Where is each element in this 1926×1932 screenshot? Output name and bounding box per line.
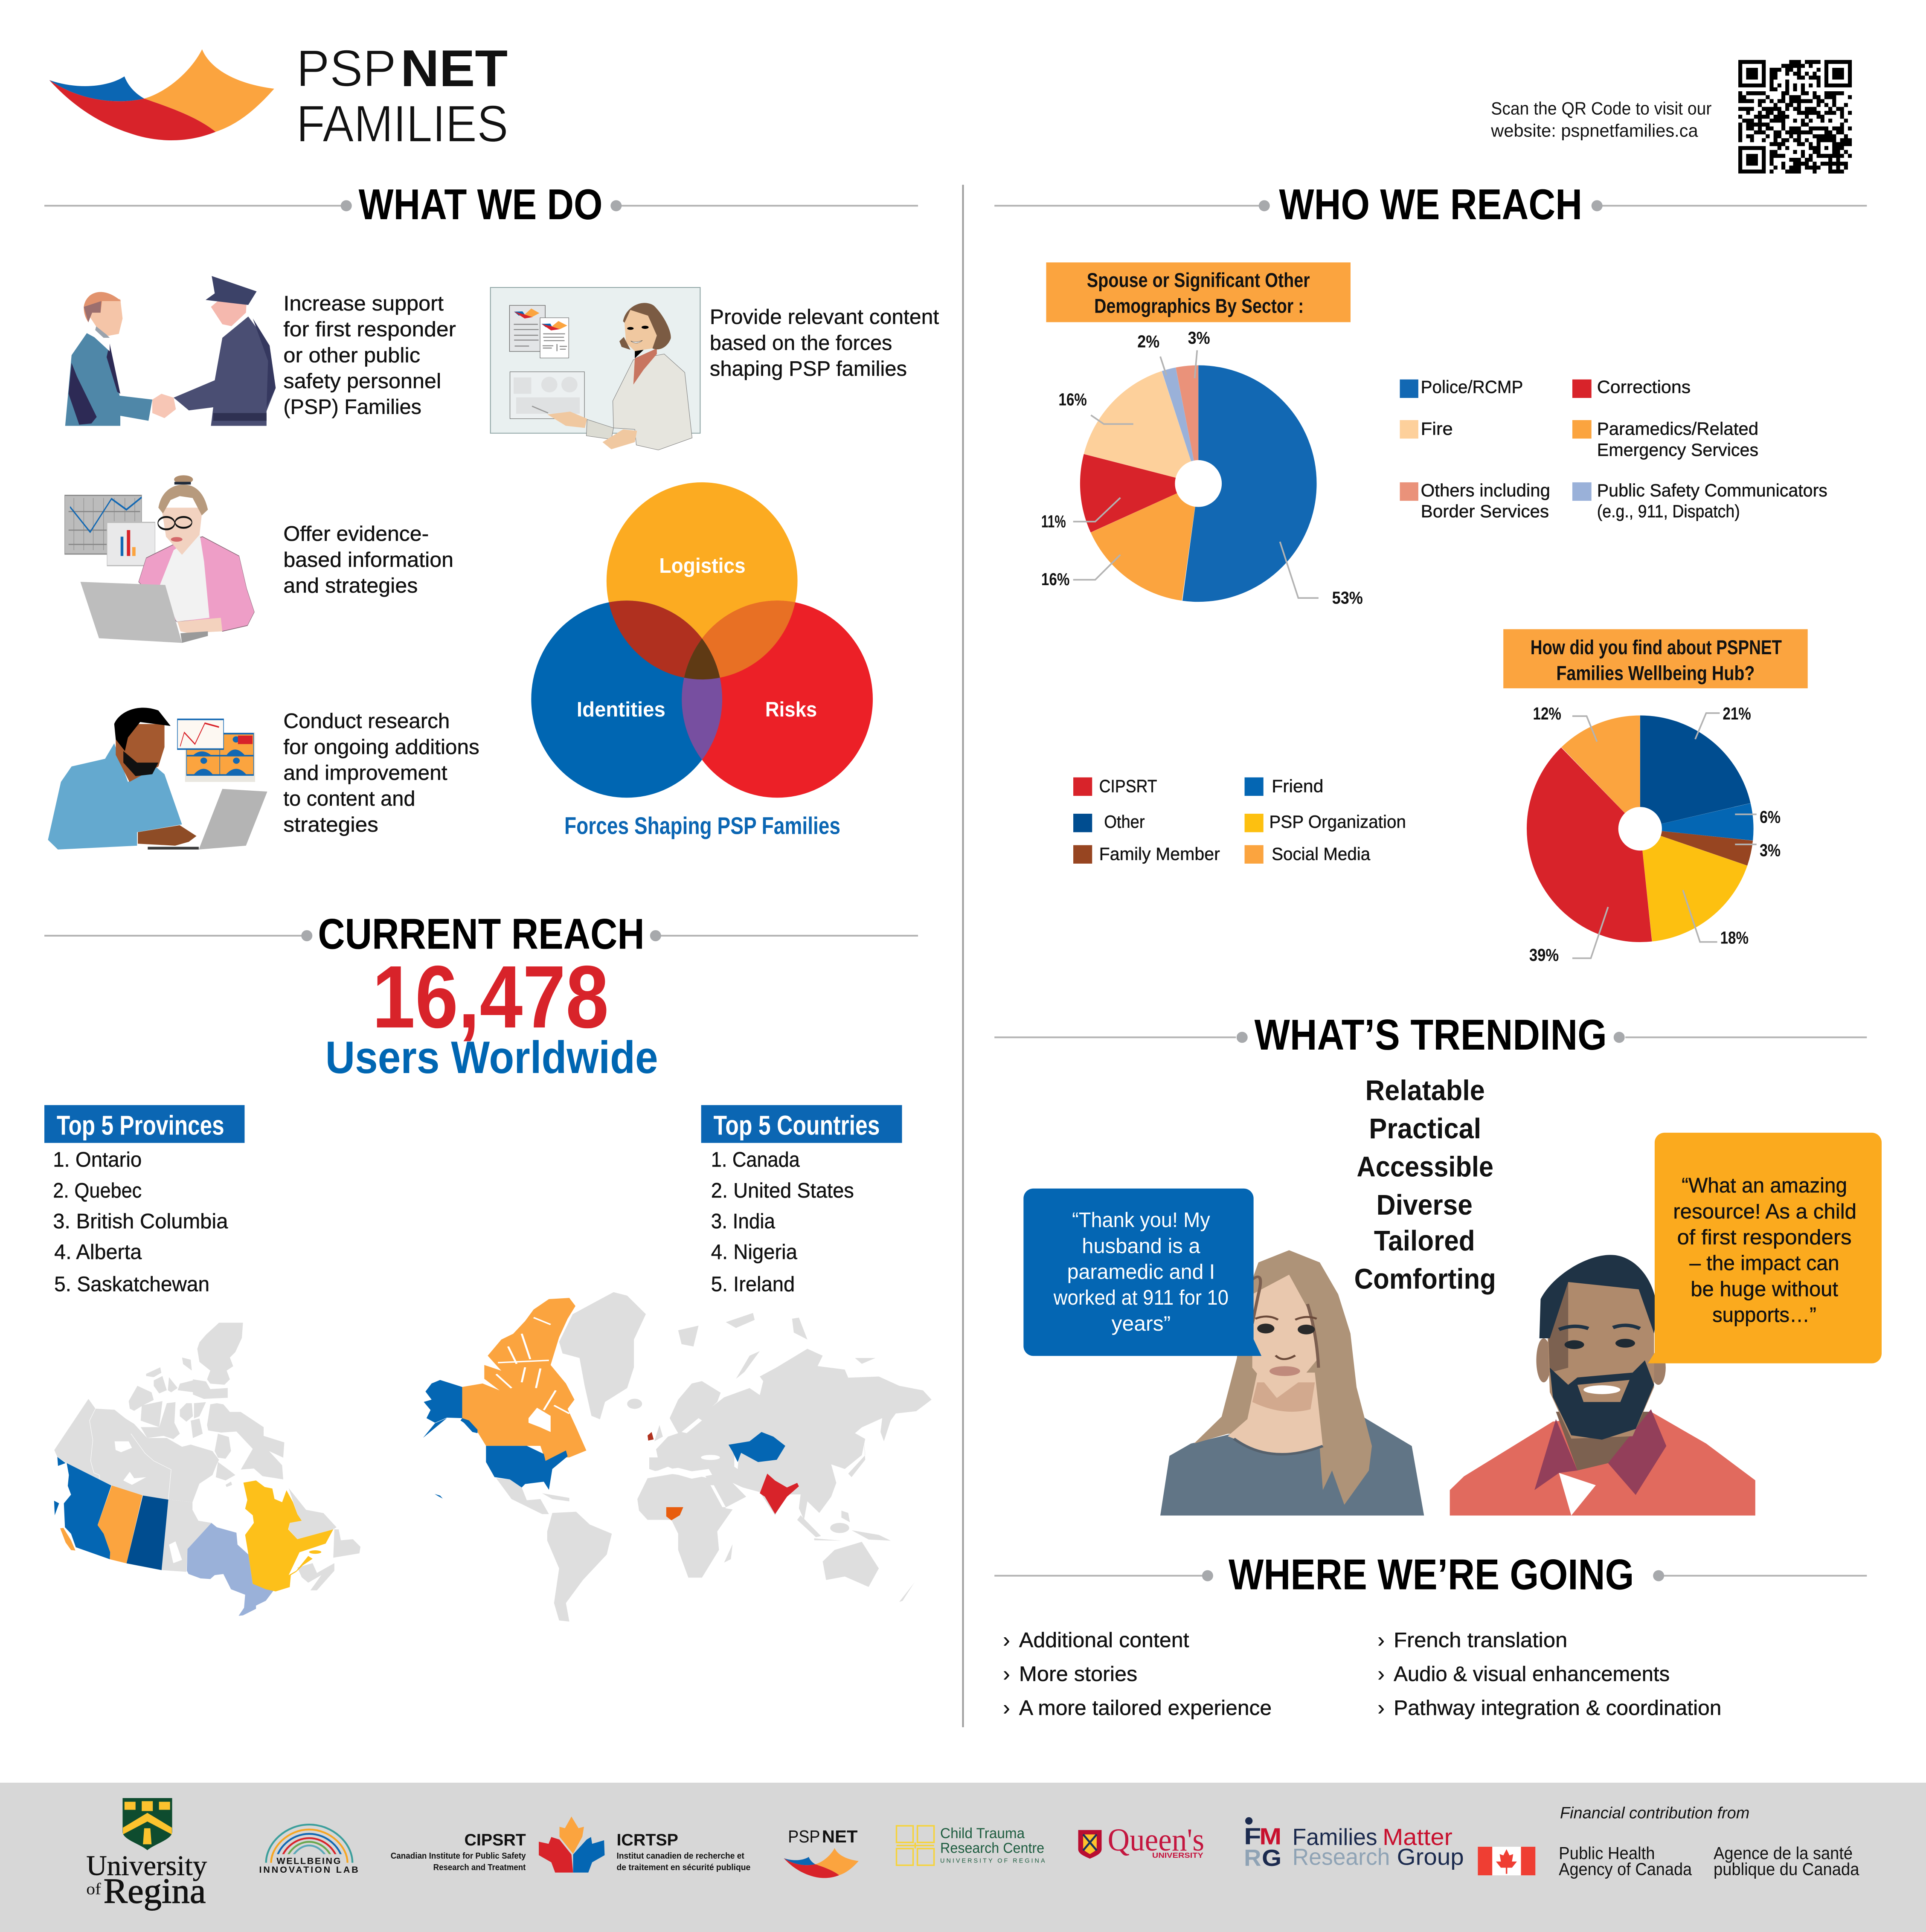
bullet list: next steps right: French translation	[1394, 1629, 1567, 1652]
logo: Canada flag and funder: Financial contribution from	[1560, 1804, 1749, 1822]
logo: Canada flag and funder: Public Health	[1559, 1843, 1655, 1863]
list: top 5 provinces	[44, 1105, 244, 1296]
list: top 5 provinces: 1. Ontario	[53, 1149, 142, 1172]
logo: CIPSRT ICRTSP	[391, 1816, 750, 1873]
pie chart: how users found the hub: 21%	[1723, 704, 1751, 723]
list: top 5 countries: 5. Ireland	[711, 1273, 795, 1296]
speech bubble: orange testimonial	[1648, 1133, 1882, 1363]
logo: Child Trauma Research Centre	[897, 1825, 1045, 1865]
speech bubble: blue testimonial: husband is a	[1082, 1235, 1200, 1258]
venn caption: Forces Shaping PSP Families	[564, 812, 840, 839]
logo: Families Matter Research Group: Research	[1293, 1844, 1390, 1870]
logo wordmark	[296, 39, 508, 153]
heading: Where We're Going	[994, 1550, 1867, 1598]
list: top 5 provinces: 5. Saskatchewan	[54, 1273, 209, 1296]
list: top 5 provinces: 3. British Columbia	[53, 1210, 228, 1233]
pie chart: spouse demographics by sector: 53%	[1332, 588, 1363, 607]
list: top 5 countries	[701, 1105, 902, 1296]
bullet list: next steps left: ›	[1003, 1629, 1010, 1652]
speech bubble: blue testimonial: “Thank you! My	[1072, 1209, 1210, 1232]
speech bubble: blue testimonial	[1023, 1189, 1261, 1356]
trending words: Tailored	[1374, 1225, 1475, 1257]
logo: Queen's University: UNIVERSITY	[1152, 1851, 1203, 1859]
logo: PSPNET small: PSP	[788, 1827, 820, 1846]
logo: Families Matter Research Group: G	[1262, 1845, 1281, 1871]
text: provide relevant content: Provide relevant content	[710, 306, 939, 329]
logo: Wellbeing Innovation Lab	[259, 1825, 358, 1875]
QR code caption: website: pspnetfamilies.ca	[1490, 121, 1698, 141]
legend: spouse demographics: Public Safety Communicators	[1597, 480, 1827, 500]
logo: Families Matter Research Group: Matter	[1383, 1824, 1452, 1850]
text: conduct research: and improvement	[283, 762, 447, 785]
heading: What's Trending: WHAT’S TRENDING	[1255, 1011, 1607, 1059]
heading: Who We Reach: WHO WE REACH	[1279, 180, 1582, 229]
chart title: how did you find: Families Wellbeing Hub?	[1556, 662, 1755, 685]
QR code caption: Scan the QR Code to visit our	[1491, 99, 1711, 119]
logo mark	[49, 49, 274, 140]
chart title: how did you find: How did you find about PSPNET	[1531, 636, 1782, 659]
legend: spouse demographics: Fire	[1421, 419, 1453, 439]
text: evidence-based information: based information	[283, 548, 453, 571]
list: top 5 countries: 1. Canada	[711, 1149, 800, 1172]
legend: how users found the hub: Family Member	[1099, 844, 1220, 864]
logo wordmark: PSP	[296, 39, 396, 97]
logo: University of Regina: of	[86, 1881, 101, 1898]
legend: how users found the hub	[1073, 776, 1406, 864]
logo: Wellbeing Innovation Lab: INNOVATION LAB	[259, 1864, 358, 1875]
speech bubble: orange testimonial: be huge without	[1691, 1278, 1838, 1301]
logo: Canada flag and funder: publique du Canada	[1714, 1859, 1859, 1879]
text: conduct research: to content and	[283, 787, 415, 810]
text: evidence-based information: Offer evidence-	[283, 522, 429, 545]
vertical divider	[962, 185, 963, 1727]
map: Canada provinces	[54, 1323, 360, 1616]
list: top 5 provinces: 2. Quebec	[53, 1179, 142, 1202]
logo wordmark: NET	[401, 39, 508, 97]
text: evidence-based information: and strategies	[283, 574, 418, 597]
logo: Child Trauma Research Centre: UNIVERSITY OF REGINA	[940, 1858, 1045, 1865]
bullet list: next steps right: Audio & visual enhancements	[1394, 1663, 1670, 1686]
speech bubble: orange testimonial: of first responders	[1677, 1226, 1852, 1249]
legend: spouse demographics: (e.g., 911, Dispatch)	[1597, 501, 1740, 521]
chart title: how did you find	[1503, 629, 1808, 688]
pie chart: spouse demographics by sector: 2%	[1137, 332, 1159, 351]
pie chart: how users found the hub: 39%	[1529, 945, 1559, 965]
bullet list: next steps right: ›	[1378, 1663, 1385, 1686]
illustration: man working at laptop	[48, 708, 267, 850]
subheading: users worldwide: Users Worldwide	[325, 1032, 658, 1083]
map: world	[423, 1292, 932, 1622]
logo: Wellbeing Innovation Lab: WELLBEING	[276, 1856, 340, 1866]
footer panel: partner logos	[0, 1783, 1926, 1932]
logo: University of Regina	[86, 1798, 207, 1911]
text: increase support: safety personnel	[283, 370, 441, 393]
pie chart: spouse demographics by sector: 3%	[1188, 328, 1210, 348]
illustration: woman with laptop and charts	[65, 475, 254, 643]
logo: Canada flag and funder: Agence de la santé	[1714, 1843, 1853, 1863]
logo: CIPSRT ICRTSP: Canadian Institute for Public Safety	[391, 1851, 526, 1861]
chart title: spouse demographics: Spouse or Significant Other	[1087, 269, 1310, 292]
text: provide relevant content	[710, 306, 939, 380]
speech bubble: orange testimonial: – the impact can	[1689, 1252, 1839, 1275]
trending words: Relatable	[1365, 1075, 1485, 1107]
pie chart: spouse demographics by sector: 16%	[1041, 569, 1069, 589]
bullet list: next steps left: Additional content	[1019, 1629, 1189, 1652]
heading: What's Trending	[994, 1011, 1867, 1059]
text: conduct research: for ongoing additions	[283, 736, 479, 759]
logo: Families Matter Research Group: Group	[1397, 1844, 1464, 1870]
text: increase support	[283, 292, 456, 419]
bullet list: next steps right	[1378, 1629, 1721, 1720]
pie chart: how users found the hub: 18%	[1720, 928, 1749, 948]
text: increase support: or other public	[283, 344, 420, 367]
logo: CIPSRT ICRTSP: ICRTSP	[616, 1831, 678, 1849]
pie chart: how users found the hub: 3%	[1760, 841, 1781, 860]
pie chart: how users found the hub: 12%	[1533, 704, 1561, 723]
legend: spouse demographics: Corrections	[1597, 377, 1691, 397]
legend: how users found the hub: CIPSRT	[1099, 776, 1157, 796]
legend: spouse demographics: Paramedics/Related	[1597, 419, 1758, 439]
list: top 5 countries: 2. United States	[711, 1179, 854, 1202]
text: conduct research	[283, 710, 479, 836]
trending words: Accessible	[1357, 1152, 1493, 1183]
venn diagram: forces shaping PSP families: Risks	[765, 698, 817, 721]
pie chart: how users found the hub	[1529, 704, 1781, 965]
heading: What We Do: WHAT WE DO	[359, 180, 603, 229]
bullet list: next steps left: More stories	[1019, 1663, 1137, 1686]
logo: CIPSRT ICRTSP: Institut canadien de recherche et	[616, 1851, 744, 1861]
legend: how users found the hub: PSP Organization	[1269, 812, 1406, 832]
text: provide relevant content: based on the forces	[710, 331, 892, 354]
logo: University of Regina: University	[86, 1851, 207, 1882]
bullet list: next steps left: A more tailored experience	[1019, 1697, 1272, 1720]
speech bubble: orange testimonial: supports…”	[1712, 1304, 1816, 1327]
pie chart: spouse demographics by sector: 16%	[1058, 389, 1087, 409]
QR code caption	[1490, 99, 1711, 141]
bullet list: next steps left: ›	[1003, 1697, 1010, 1720]
bullet list: next steps right: ›	[1378, 1629, 1385, 1652]
logo: CIPSRT ICRTSP: Research and Treatment	[433, 1863, 526, 1872]
logo: Families Matter Research Group	[1244, 1817, 1464, 1871]
heading: Where We're Going: WHERE WE’RE GOING	[1229, 1550, 1634, 1598]
bullet list: next steps left: ›	[1003, 1663, 1010, 1686]
logo: Canada flag and funder: Agency of Canada	[1559, 1859, 1692, 1879]
trending words: Diverse	[1377, 1189, 1473, 1221]
text: provide relevant content: shaping PSP families	[710, 357, 907, 380]
list: top 5 countries: Top 5 Countries	[714, 1110, 880, 1140]
logo: Child Trauma Research Centre: Research Centre	[940, 1840, 1044, 1857]
trending words: Practical	[1369, 1113, 1481, 1145]
QR code	[1738, 60, 1852, 174]
text: increase support: for first responder	[283, 318, 456, 341]
speech bubble: orange testimonial: resource! As a child	[1673, 1200, 1856, 1223]
trending words: Comforting	[1354, 1264, 1496, 1295]
legend: how users found the hub: Friend	[1272, 776, 1323, 796]
bullet list: next steps right: ›	[1378, 1697, 1385, 1720]
text: increase support: (PSP) Families	[283, 396, 421, 419]
bullet list: next steps left	[1003, 1629, 1272, 1720]
heading: Who We Reach	[994, 180, 1867, 229]
logo: Queen's University: Queen's	[1108, 1822, 1204, 1858]
logo: Child Trauma Research Centre: Child Trauma	[940, 1825, 1025, 1842]
legend: how users found the hub: Other	[1104, 812, 1145, 832]
big number: users: 16,478	[372, 948, 609, 1047]
logo wordmark: FAMILIES	[296, 95, 508, 153]
pie chart: spouse demographics by sector: 11%	[1041, 511, 1066, 531]
text: increase support: Increase support	[283, 292, 444, 315]
logo: Families Matter Research Group: Families	[1293, 1824, 1377, 1850]
logo: CIPSRT ICRTSP: de traitement en sécurité publique	[616, 1863, 750, 1872]
pie chart: spouse demographics by sector	[1041, 328, 1363, 607]
bullet list: next steps right: Pathway integration & coordination	[1394, 1697, 1721, 1720]
illustration: man portrait	[1450, 1255, 1755, 1516]
logo: University of Regina: Regina	[104, 1871, 206, 1911]
legend: spouse demographics: Police/RCMP	[1421, 377, 1523, 397]
list: top 5 countries: 3. India	[711, 1210, 776, 1233]
trending words	[1354, 1075, 1496, 1295]
legend: spouse demographics: Emergency Services	[1597, 440, 1758, 460]
logo: PSPNET small	[784, 1827, 859, 1878]
venn diagram: forces shaping PSP families	[531, 482, 873, 798]
legend: spouse demographics	[1400, 377, 1827, 521]
text: conduct research: Conduct research	[283, 710, 450, 733]
list: top 5 countries: 4. Nigeria	[711, 1241, 798, 1264]
legend: how users found the hub: Social Media	[1272, 844, 1371, 864]
heading: Current Reach	[44, 910, 918, 958]
speech bubble: orange testimonial: “What an amazing	[1682, 1174, 1847, 1197]
venn diagram: forces shaping PSP families: Logistics	[659, 554, 746, 577]
list: top 5 provinces: Top 5 Provinces	[57, 1110, 224, 1140]
text: conduct research: strategies	[283, 813, 378, 836]
chart title: spouse demographics: Demographics By Sector :	[1094, 295, 1304, 318]
logo: PSPNET Families	[49, 39, 508, 153]
heading: What We Do	[44, 180, 918, 229]
illustration: handshake between civilian and officer	[65, 276, 276, 426]
logo: Families Matter Research Group: M	[1259, 1823, 1281, 1849]
legend: spouse demographics: Others including	[1421, 480, 1550, 500]
chart title: spouse demographics	[1046, 262, 1351, 322]
pie chart: how users found the hub: 6%	[1760, 807, 1781, 827]
venn diagram: forces shaping PSP families: Identities	[577, 698, 665, 721]
speech bubble: blue testimonial: years”	[1112, 1312, 1171, 1335]
logo: CIPSRT ICRTSP: CIPSRT	[464, 1831, 526, 1849]
list: top 5 provinces: 4. Alberta	[54, 1241, 142, 1264]
logo: PSPNET small: NET	[822, 1827, 858, 1846]
text: evidence-based information	[283, 522, 453, 597]
illustration: woman portrait	[1160, 1250, 1424, 1516]
illustration: presenter at whiteboard	[491, 287, 700, 450]
logo: Canada flag and funder	[1478, 1804, 1859, 1879]
logo: Families Matter Research Group: R	[1244, 1845, 1261, 1871]
legend: spouse demographics: Border Services	[1421, 501, 1549, 521]
speech bubble: blue testimonial: paramedic and I	[1067, 1260, 1215, 1283]
heading: Current Reach: CURRENT REACH	[318, 910, 645, 958]
logo: Families Matter Research Group: F	[1244, 1823, 1261, 1849]
speech bubble: blue testimonial: worked at 911 for 10	[1053, 1286, 1229, 1309]
